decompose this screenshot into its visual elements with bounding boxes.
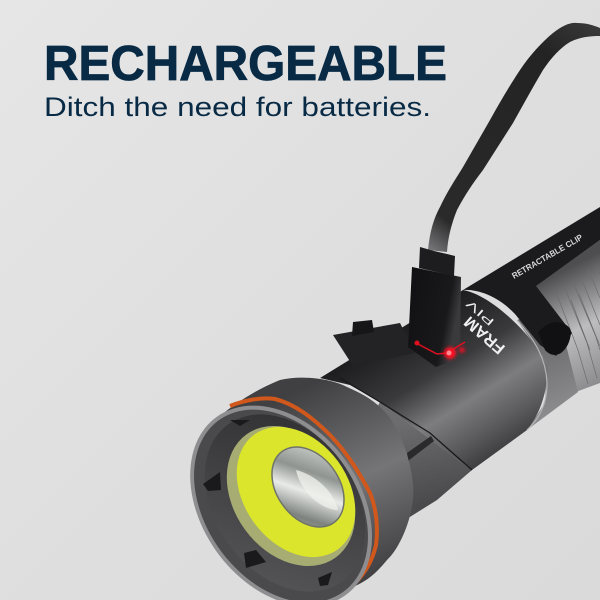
neck collar	[340, 378, 472, 520]
orange ring	[230, 398, 377, 581]
title: RECHARGEABLE	[44, 37, 447, 91]
front bezel	[190, 406, 372, 600]
rubber port cap	[333, 320, 415, 366]
bezel cavity	[171, 383, 399, 600]
usb strain relief	[419, 247, 455, 276]
bezel notches	[203, 420, 332, 586]
body collar highlight	[517, 320, 547, 430]
PIV: PIV	[463, 296, 497, 328]
charging LED glow	[414, 340, 465, 359]
grip collar	[517, 310, 578, 430]
reflector highlight	[296, 470, 338, 510]
COB lens	[200, 401, 382, 591]
reflector	[257, 433, 359, 541]
knurled grip	[530, 240, 600, 393]
FRAM: FRAM	[461, 312, 509, 357]
notch left	[203, 472, 221, 491]
notch top	[230, 420, 250, 426]
brand text	[461, 296, 509, 357]
notch bottom	[244, 550, 266, 568]
collar slot	[407, 436, 434, 461]
yellow COB	[212, 404, 380, 580]
clip label: RETRACTABLE CLIP	[510, 232, 585, 281]
usb connector	[408, 267, 461, 367]
clip tab	[538, 322, 571, 355]
notch lower right	[318, 572, 332, 586]
flashlight body	[320, 290, 547, 470]
flashlight head	[225, 378, 413, 600]
lens rim	[200, 401, 382, 591]
flashlight	[171, 23, 600, 600]
usb cable	[428, 23, 600, 252]
retractable clip band	[463, 207, 600, 356]
subtitle: Ditch the need for batteries.	[44, 92, 431, 122]
collar seam	[340, 378, 472, 470]
